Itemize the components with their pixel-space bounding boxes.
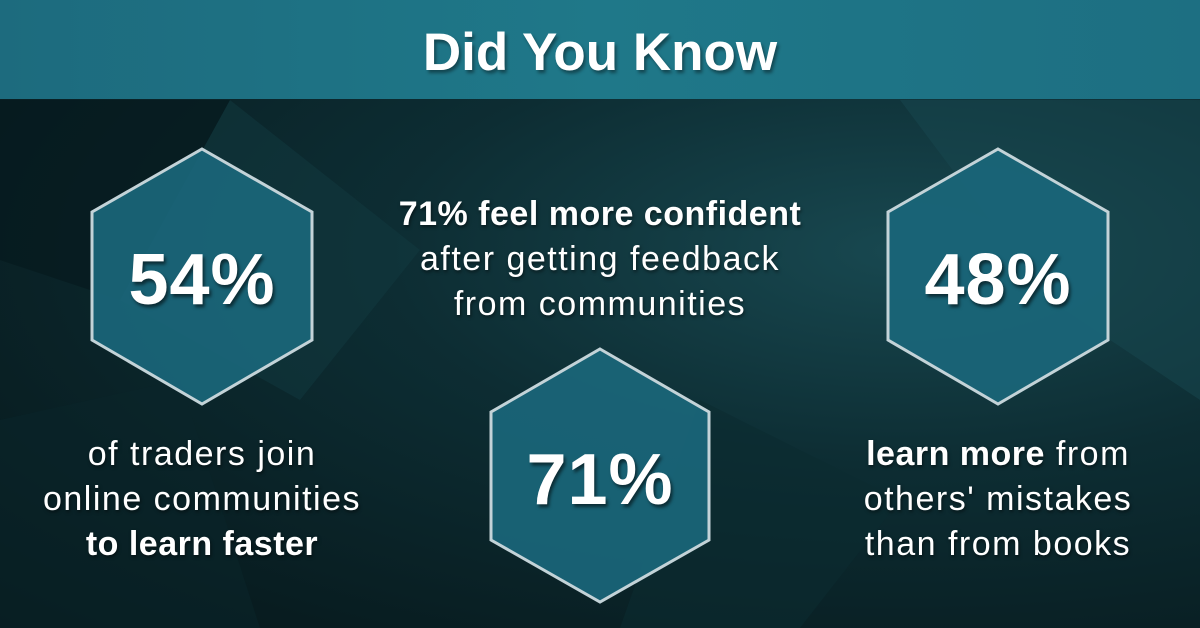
text: left: of traders join <box>88 435 316 473</box>
text: center top <box>399 195 802 323</box>
text: left: to learn faster <box>86 525 318 563</box>
hexagon: right <box>888 149 1108 404</box>
text: left: online communities <box>43 480 361 518</box>
stat: 54%: 54% <box>128 240 276 320</box>
stat: 48%: 48% <box>924 240 1072 320</box>
text: center top: from communities <box>454 285 746 323</box>
title: Did You Know <box>423 23 777 82</box>
title bar <box>0 0 1200 99</box>
text: right <box>864 435 1132 563</box>
text: center top: after getting feedback <box>420 240 780 278</box>
text: center top: 71% feel more confident <box>399 195 801 233</box>
hexagon: left <box>92 149 312 404</box>
text: left <box>43 435 361 563</box>
text: right: learn more from <box>866 435 1130 473</box>
text: right: than from books <box>865 525 1131 563</box>
stat: 71%: 71% <box>526 440 674 520</box>
hexagon: center <box>491 349 709 602</box>
text: right: others' mistakes <box>864 480 1132 518</box>
